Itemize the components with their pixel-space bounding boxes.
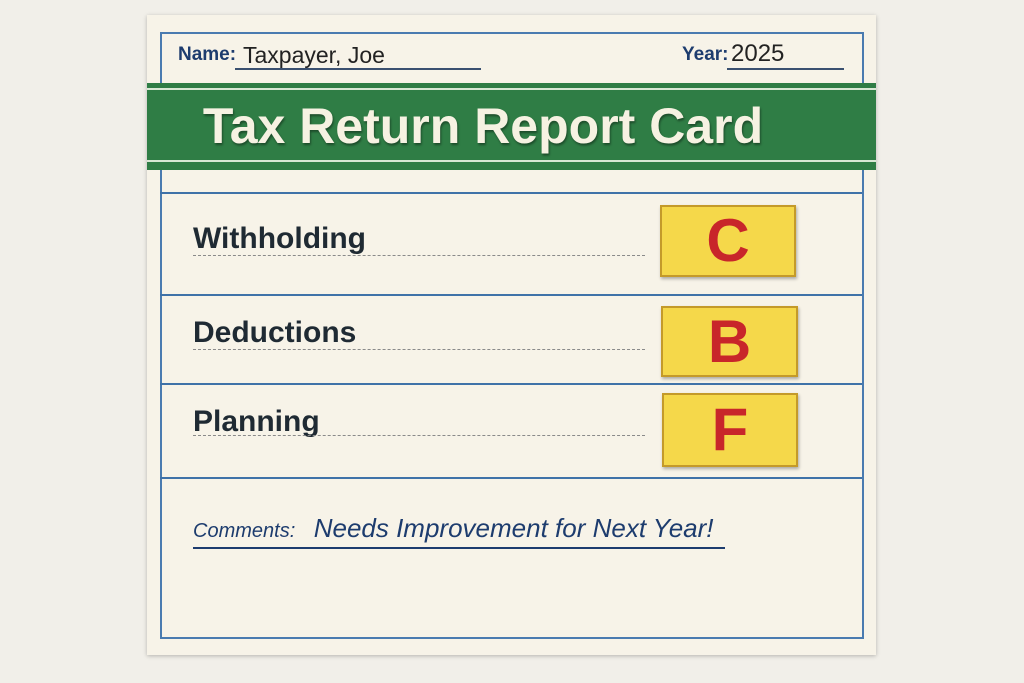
title banner bbox=[147, 83, 876, 170]
grade F bbox=[662, 393, 798, 467]
name field: Taxpayer, Joe bbox=[243, 42, 385, 68]
year field bbox=[682, 40, 844, 70]
grade B: B bbox=[708, 308, 751, 375]
grade B bbox=[661, 306, 798, 377]
row: deductions: Deductions bbox=[193, 316, 356, 349]
row: withholding: Withholding bbox=[193, 222, 366, 255]
inner border bbox=[160, 32, 864, 639]
grade C: C bbox=[706, 207, 750, 274]
row: deductions bbox=[193, 306, 801, 381]
year field: Year: bbox=[682, 44, 728, 65]
name field: Name: bbox=[178, 44, 236, 65]
name field bbox=[178, 42, 481, 70]
grade F: F bbox=[712, 396, 748, 463]
card bbox=[147, 15, 876, 655]
row: planning: Planning bbox=[193, 405, 320, 438]
row: withholding bbox=[193, 205, 799, 281]
row: planning bbox=[193, 393, 801, 471]
grade C bbox=[660, 205, 796, 277]
year field: 2025 bbox=[731, 40, 784, 67]
title: Tax Return Report Card bbox=[203, 98, 763, 154]
comments: Comments: Needs Improvement for Next Year! bbox=[193, 513, 714, 543]
